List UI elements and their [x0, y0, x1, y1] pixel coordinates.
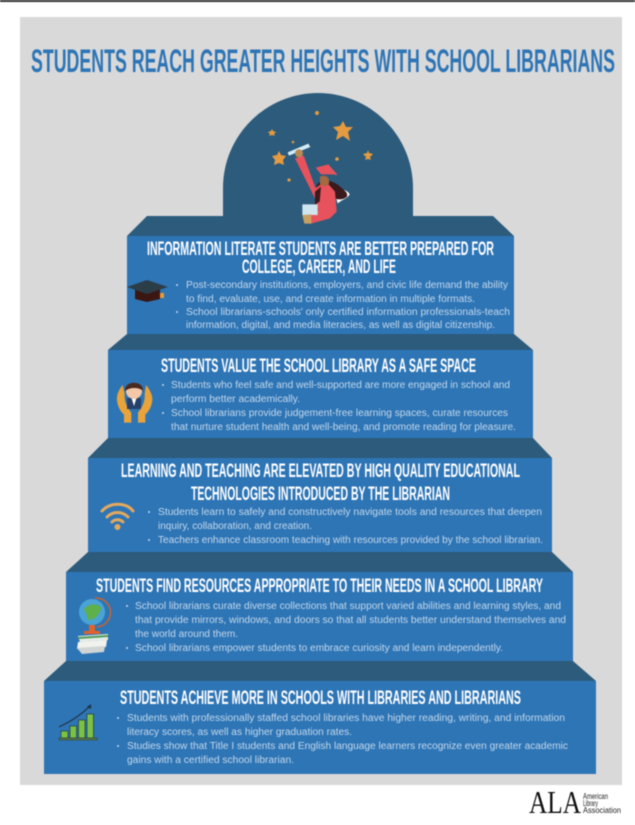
icon: graduate	[288, 144, 350, 224]
step 5: achievement	[44, 661, 596, 774]
bullet list: the world around them.	[135, 629, 238, 640]
bullet list: Students who feel safe and well-supported are more engaged in school and	[171, 380, 510, 391]
step 4: resources	[66, 552, 573, 661]
bullet list	[117, 713, 568, 766]
step 2: safe space	[108, 334, 533, 438]
icon: stars	[268, 111, 373, 182]
bullet list: that provide mirrors, windows, and doors so that all students better understand themselves and	[135, 615, 566, 626]
bullet list: School librarians curate diverse collections that support varied abilities and learning styles, and	[135, 601, 561, 612]
bullet list	[126, 601, 566, 654]
bullet list: School librarians-schools' only certified information professionals-teach	[186, 307, 510, 318]
logo: American Library Association: American	[583, 792, 608, 801]
heading	[147, 239, 494, 278]
bullet list	[162, 380, 516, 433]
logo: American Library Association: Association	[583, 806, 621, 815]
bullet list: to find, evaluate, use, and create information in multiple formats.	[186, 294, 475, 305]
bullet list: perform better academically.	[171, 394, 300, 405]
bullet list: that nurture student health and well-being, and promote reading for pleasure.	[171, 422, 516, 433]
heading	[121, 461, 520, 505]
logo: American Library Association: ALA	[529, 784, 581, 820]
icon: graduation cap	[127, 280, 168, 302]
step 3: educational technologies	[88, 438, 552, 552]
icon: wifi	[102, 504, 133, 528]
icon: growth chart	[59, 704, 97, 740]
bullet list: School librarians empower students to embrace curiosity and learn independently.	[135, 643, 503, 654]
step 1: information literacy	[127, 216, 514, 334]
logo: American Library Association: Library	[583, 799, 598, 808]
bullet list: gains with a certified school librarian.	[127, 755, 294, 766]
bullet list	[148, 507, 543, 546]
bullet list: Students with professionally staffed school libraries have higher reading, writing, and information	[127, 713, 565, 724]
bullet list	[176, 280, 510, 331]
heading: COLLEGE, CAREER, AND LIFE	[242, 257, 396, 278]
bullet list: School librarians provide judgement-free learning spaces, curate resources	[171, 408, 508, 419]
icon: child in hands	[117, 383, 152, 423]
bullet list: Students learn to safely and constructively navigate tools and resources that deepen	[158, 507, 542, 518]
bullet list: inquiry, collaboration, and creation.	[158, 521, 312, 532]
bullet list: Post-secondary institutions, employers, and civic life demand the ability	[186, 280, 508, 291]
bullet list: Teachers enhance classroom teaching with resources provided by the school librarian.	[158, 535, 543, 546]
bullet list: literacy scores, as well as higher graduation rates.	[127, 727, 352, 738]
icon: globe on books	[77, 598, 111, 654]
bullet list: information, digital, and media literacies, as well as digital citizenship.	[186, 320, 495, 331]
arch with graduate illustration	[223, 93, 413, 224]
bullet list: Studies show that Title I students and English language learners recognize even greater academic	[127, 741, 568, 752]
